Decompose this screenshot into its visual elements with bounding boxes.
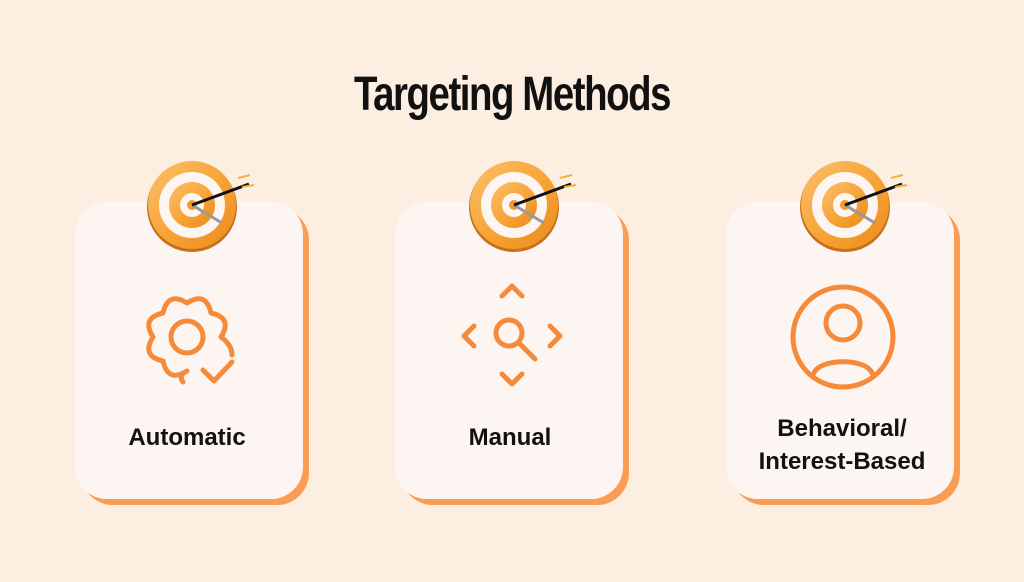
icon: target 3 — [800, 161, 907, 252]
icon: search with arrows — [464, 286, 560, 384]
panel: behavioral — [726, 202, 960, 505]
panel: manual — [395, 202, 629, 505]
icon: target 1 — [147, 161, 254, 252]
icon: gear with check — [149, 299, 232, 382]
icon: user — [793, 287, 893, 387]
title: Targeting Methods — [354, 68, 670, 121]
icon: target 2 — [469, 161, 576, 252]
panel: behavioral: Interest-Based — [759, 448, 925, 475]
label: Behavioral/ — [777, 415, 907, 442]
label: Manual — [469, 424, 551, 451]
label: Automatic — [128, 424, 246, 451]
panel: automatic — [75, 202, 309, 505]
